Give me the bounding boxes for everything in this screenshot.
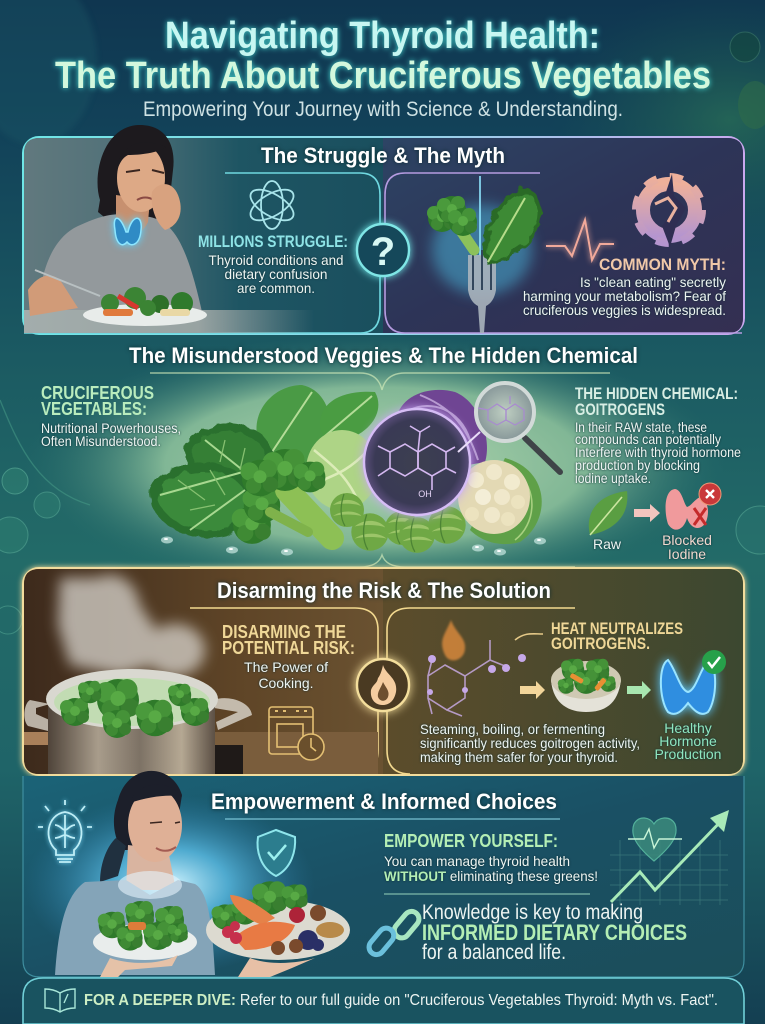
subtitle: Empowering Your Journey with Science & Understanding. xyxy=(143,98,623,121)
illustration: woman holding healthy plates xyxy=(55,771,350,977)
text block: cooking methods: Steaming, boiling, or fermenting xyxy=(420,721,605,737)
label: healthy hormone production: Production xyxy=(655,746,721,762)
glow behind woman xyxy=(25,795,315,975)
text block: cooking methods: significantly reduces goitrogen activity, xyxy=(420,735,640,751)
callout: common myth: cruciferous veggies is widespread. xyxy=(523,302,726,318)
chemical magnifier circle xyxy=(364,409,470,515)
icon: healthy thyroid xyxy=(661,650,726,714)
icon: raw leaf xyxy=(589,491,627,535)
arrow: bowl to healthy thyroid xyxy=(627,681,651,699)
icon: shield with check xyxy=(258,830,295,876)
chart: rising trend with heart xyxy=(610,810,729,905)
callout: informed dietary choices: for a balanced life. xyxy=(422,941,566,964)
callout: cruciferous vegetables: Often Misunderstood. xyxy=(41,433,161,449)
divider xyxy=(384,893,590,895)
callout: millions struggle: dietary confusion xyxy=(224,266,328,282)
callout: cruciferous vegetables xyxy=(41,383,181,449)
label: blocked iodine xyxy=(662,532,712,562)
section heading: The Struggle & The Myth xyxy=(261,143,505,168)
callout: hidden chemical goitrogens: iodine uptake. xyxy=(575,470,651,486)
icon: open book xyxy=(45,989,75,1012)
callout: informed dietary choices: INFORMED DIETARY CHOICES xyxy=(422,920,687,945)
icon: flame badge xyxy=(357,659,409,711)
callout: common myth: Is "clean eating" secretly xyxy=(580,274,726,290)
broccoli xyxy=(232,449,332,544)
kale xyxy=(155,427,270,534)
icon: glowing thyroid xyxy=(114,218,141,245)
callout: heat neutralizes goitrogens: GOITROGENS. xyxy=(551,634,650,653)
purple cabbage xyxy=(396,390,487,470)
icon: chain link xyxy=(366,908,422,958)
divider xyxy=(225,818,560,820)
callout: disarming the potential risk: The Power of xyxy=(244,659,328,675)
callout: cruciferous vegetables: Nutritional Powerhouses, xyxy=(41,420,181,436)
icon: lightbulb brain xyxy=(38,800,92,862)
callout: empower yourself: WITHOUT eliminating these greens! xyxy=(384,868,598,884)
icon: oven with timer xyxy=(269,707,324,760)
arrow: molecule to bowl xyxy=(520,681,545,699)
callout: hidden chemical goitrogens: production by blocking xyxy=(575,457,700,473)
panel: footer xyxy=(23,978,744,1024)
heading: Empowerment & Informed Choices xyxy=(211,789,557,814)
callout: hidden chemical goitrogens: In their RAW state, these xyxy=(575,419,707,435)
callout: millions struggle: are common. xyxy=(237,280,315,296)
illustration: heat neutralised molecule xyxy=(427,620,543,716)
callout: informed dietary choices: Knowledge is key to making xyxy=(422,901,643,924)
callout: hidden chemical goitrogens: Interfere with thyroid hormone xyxy=(575,444,741,460)
callout: millions struggle xyxy=(198,232,348,296)
subpanel: millions struggle xyxy=(24,173,380,333)
callout: disarming the potential risk: DISARMING THE xyxy=(222,622,346,642)
icon: broken gear xyxy=(636,174,702,247)
footer text: FOR A DEEPER DIVE: Refer to our full guide on "Cruciferous Vegetables Thyroid: Myth vs. Fact". xyxy=(84,992,718,1009)
callout: common myth xyxy=(523,255,726,318)
label: healthy hormone production xyxy=(655,720,721,762)
callout: hidden chemical goitrogens xyxy=(575,384,741,486)
icon: knot xyxy=(246,181,298,229)
brussels sprouts xyxy=(330,493,466,553)
icon: pulse line xyxy=(546,220,614,260)
panel: the struggle and the myth xyxy=(23,125,744,334)
icon: question mark badge: ? xyxy=(371,230,395,274)
callout: informed dietary choices xyxy=(422,901,687,964)
subpanel outlines xyxy=(190,608,575,774)
callout: cruciferous vegetables: VEGETABLES: xyxy=(41,399,147,419)
icon: question mark badge xyxy=(357,224,409,276)
water droplets xyxy=(161,536,546,556)
callout: empower yourself: You can manage thyroid health xyxy=(384,853,570,869)
title: The Truth About Cruciferous Vegetables xyxy=(55,55,711,97)
callout: hidden chemical goitrogens: compounds can potentially xyxy=(575,431,721,447)
callout: empower yourself: EMPOWER YOURSELF: xyxy=(384,831,558,851)
label: blocked iodine: Blocked xyxy=(662,532,712,548)
panel: empowerment xyxy=(23,771,744,977)
text block: cooking methods xyxy=(420,721,640,765)
illustration: worried woman with plate xyxy=(24,125,314,333)
illustration: boiling pot xyxy=(24,575,378,774)
chemical magnifier circle: OH xyxy=(418,489,432,499)
connector lines xyxy=(150,373,610,567)
label: healthy hormone production: Hormone xyxy=(659,733,717,749)
icon: bowl of cooked vegetables xyxy=(551,659,621,712)
green cabbage xyxy=(306,430,378,510)
heading: Disarming the Risk & The Solution xyxy=(217,578,551,603)
title xyxy=(55,15,711,97)
section heading: veggies: The Misunderstood Veggies & The Hidden Chemical xyxy=(129,343,638,368)
callout: common myth: COMMON MYTH: xyxy=(599,255,726,274)
callout: common myth: harming your metabolism? Fear of xyxy=(523,288,726,304)
label: blocked iodine: Iodine xyxy=(668,546,706,562)
icon: blocked thyroid xyxy=(666,483,721,530)
callout: heat neutralizes goitrogens xyxy=(551,619,683,653)
cauliflower xyxy=(458,458,542,544)
title: Navigating Thyroid Health: xyxy=(165,15,600,57)
callout: hidden chemical goitrogens: GOITROGENS xyxy=(575,400,665,419)
label: healthy hormone production: Healthy xyxy=(664,720,712,736)
callout: disarming the potential risk: POTENTIAL RISK: xyxy=(222,638,355,658)
illustration: fork with broccoli and kale xyxy=(427,176,540,333)
callout: heat neutralizes goitrogens: HEAT NEUTRALIZES xyxy=(551,619,683,638)
callout: millions struggle: MILLIONS STRUGGLE: xyxy=(198,232,348,251)
callout: empower yourself xyxy=(384,831,598,884)
label: raw: Raw xyxy=(593,536,622,552)
callout: millions struggle: Thyroid conditions and xyxy=(208,252,344,268)
callout: cruciferous vegetables: CRUCIFEROUS xyxy=(41,383,154,403)
callout: disarming the potential risk xyxy=(222,622,355,691)
callout: disarming the potential risk: Cooking. xyxy=(258,675,314,691)
subpanel: common myth xyxy=(385,173,742,333)
text block: cooking methods: making them safer for your thyroid. xyxy=(420,749,618,765)
big collard leaves xyxy=(256,385,378,463)
panel: disarming the risk xyxy=(23,568,744,775)
illustration: cruciferous vegetable pile xyxy=(155,383,560,556)
magnifying glass xyxy=(458,383,560,472)
arrow: raw to blocked xyxy=(634,504,660,522)
